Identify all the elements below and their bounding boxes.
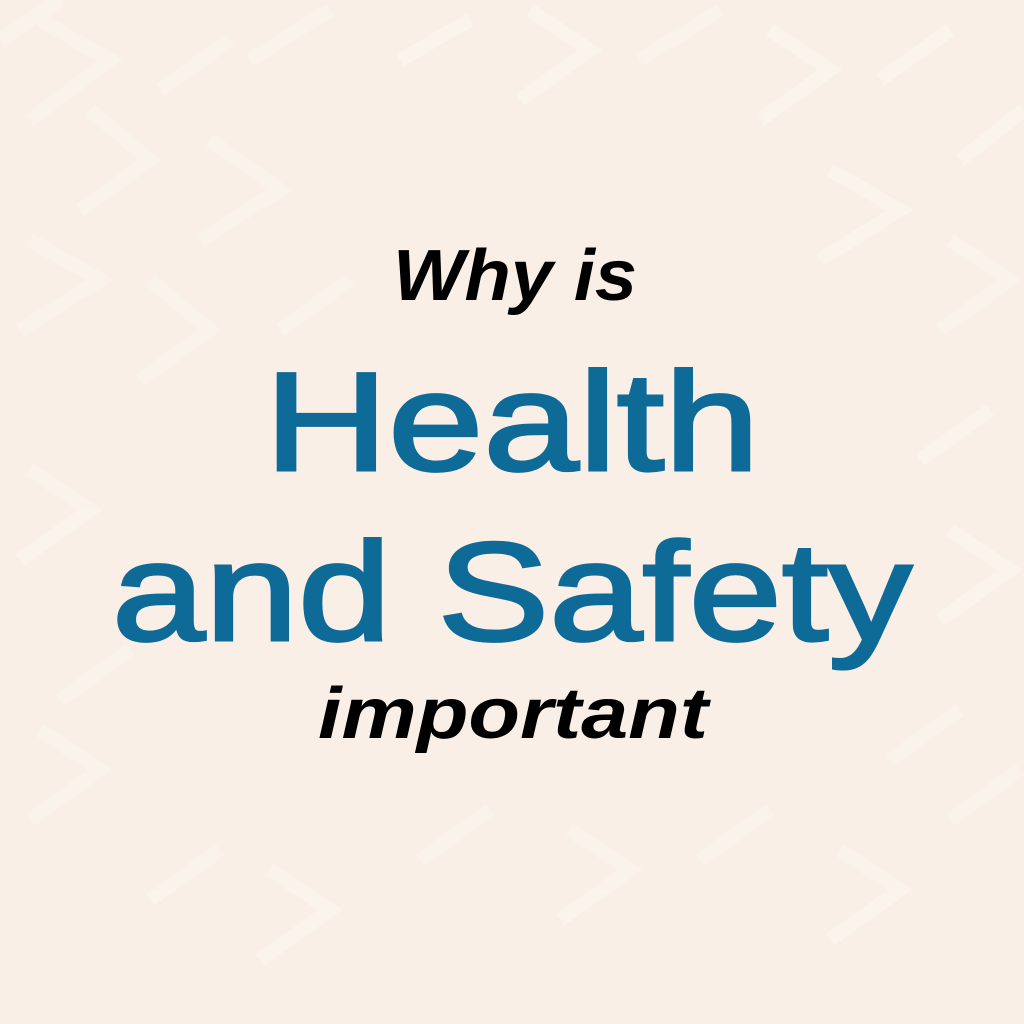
heading: Health: Health	[264, 343, 760, 500]
heading: and Safety: and Safety	[112, 513, 912, 670]
heading: important: important	[318, 674, 712, 754]
heading: Why is: Why is	[393, 236, 637, 316]
